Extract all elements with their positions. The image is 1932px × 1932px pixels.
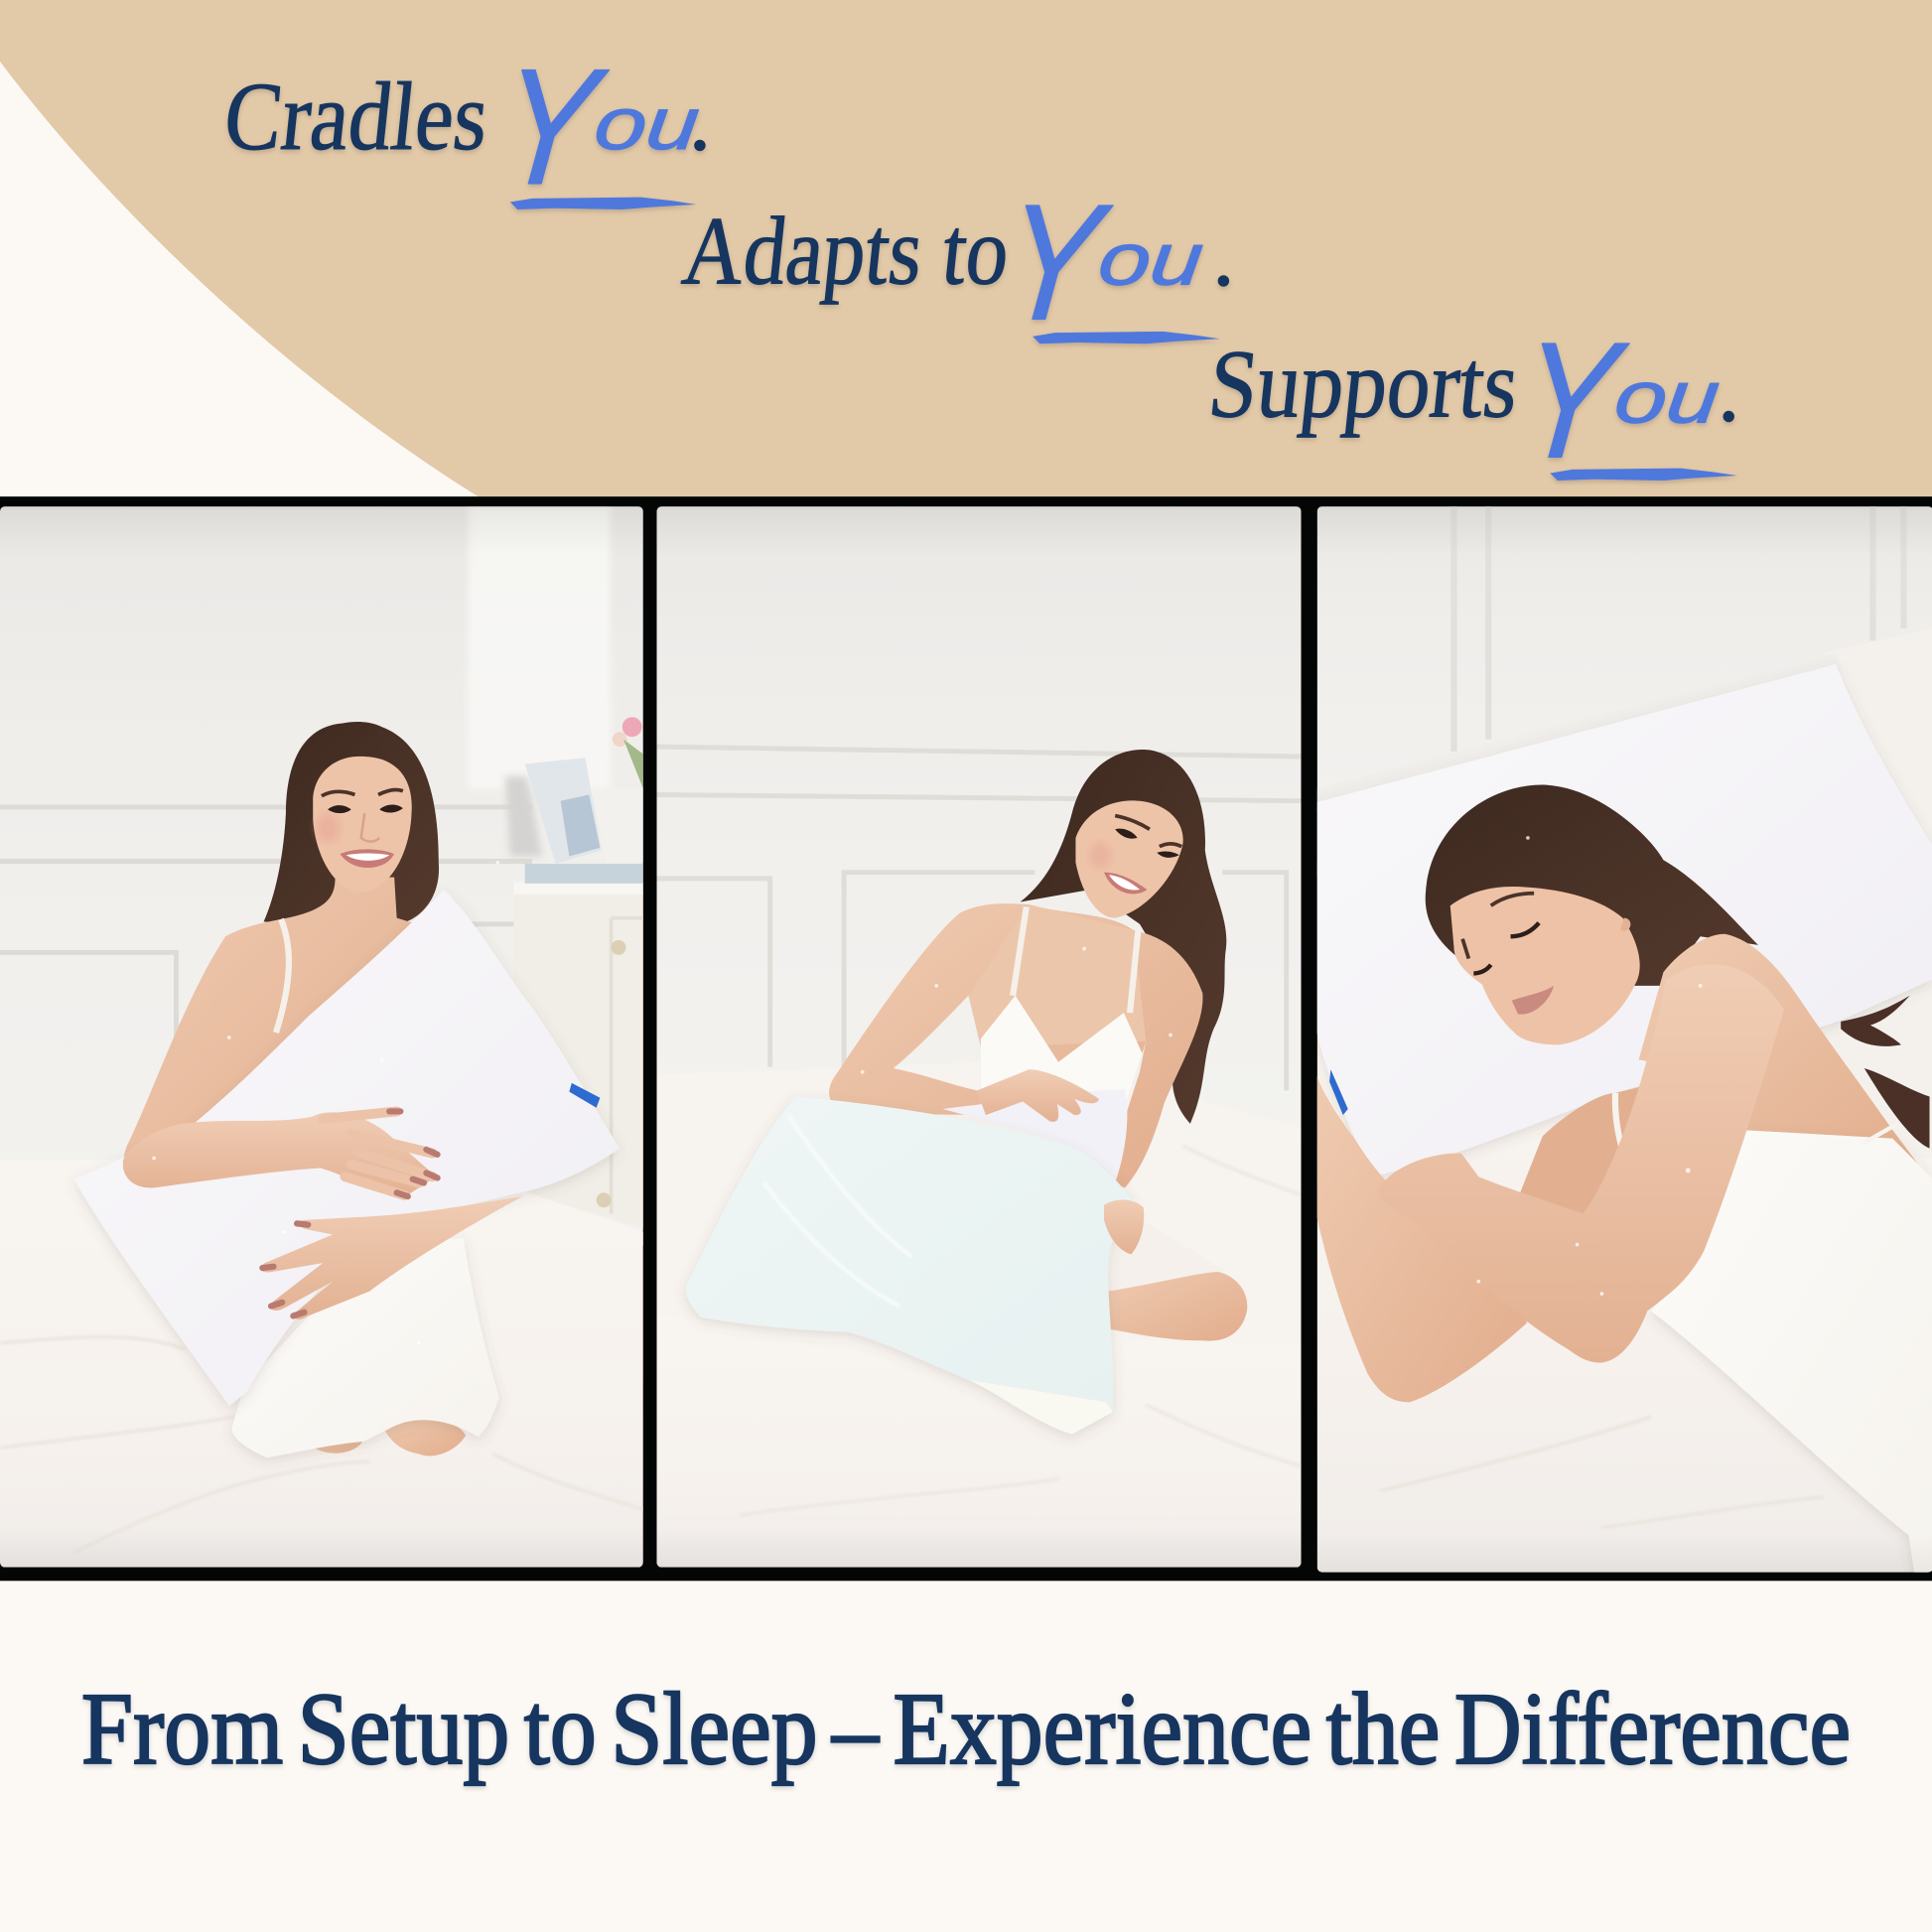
face [1450,887,1640,1044]
wall moldings [656,747,1302,1090]
tan curved header shape [0,0,1932,496]
wall [0,506,643,1246]
hair [1021,750,1226,1124]
period [1724,411,1734,422]
wall [656,506,1302,1147]
pillow label [1329,1069,1348,1115]
script word: You: Y [491,35,614,219]
text: Cradles: Cradles [219,63,493,171]
period [694,140,706,151]
knee and calf [1104,1272,1247,1341]
headboard right [1725,628,1932,1159]
pillow cream edge [968,1380,1113,1435]
photo panel 2: woman seated with pillow [656,506,1302,1568]
bed [0,1160,643,1568]
hair tail [1841,996,1930,1149]
face [313,757,412,893]
strip below headboard [1317,653,1842,813]
nightstand [514,883,643,1228]
skirt [1106,1220,1227,1292]
brush underline [510,198,696,209]
mattress lower [656,1314,1302,1568]
vignette [0,506,643,528]
headline line 3 [1204,309,1737,492]
wall [1317,506,1932,876]
dress strap [276,919,289,1033]
bottom vignette [656,1528,1302,1568]
dust specks [861,947,1173,1074]
lower forearm and hand [260,1196,522,1319]
pillow creases [763,1115,911,1307]
dress straps [1013,906,1139,1013]
wall moldings [1453,506,1903,752]
far forearm [1314,1069,1527,1402]
upper forearm and hand [123,1111,438,1196]
back and shoulder [1639,934,1928,1177]
main pillow [686,1097,1133,1435]
bed sheet folds [1380,1417,1824,1528]
face [1075,800,1183,918]
script word: You: ou [1611,355,1724,439]
dress strap [1615,1093,1627,1166]
script word: You: ou [1095,217,1207,301]
text: Supports: Supports [1204,331,1523,438]
dress bodice [981,996,1142,1099]
pillow [1314,664,1932,1176]
bed folds [0,1337,643,1553]
headline line 2 [678,171,1229,354]
dress skirt [231,1238,499,1457]
near arm [1378,964,1784,1363]
dress [1651,1130,1932,1584]
chest fill [968,904,1146,1047]
knees [314,1418,466,1455]
dust specks [1476,836,1703,1296]
photo panel 1: woman hugging pillow [0,506,643,1568]
black film frame [0,496,1932,1581]
script word: You: ou [591,81,703,165]
lower hand [1104,1199,1144,1254]
books and flowers [505,717,643,884]
vignette [1317,506,1932,556]
bed [1317,863,1932,1578]
wall moldings [0,804,532,1036]
torso under arm [1509,1084,1676,1257]
brush underline [1550,469,1737,481]
bed folds [740,1146,1302,1516]
dress strap back [1863,1124,1897,1144]
headline line 1 [219,35,708,219]
dust specks [152,861,499,1345]
hair [264,722,439,922]
torso and arms [829,903,1202,1187]
hair [1426,784,1758,986]
shoulders and upper arm [123,878,411,1158]
pillow label [569,1083,600,1108]
script word: You: Y [996,171,1118,354]
window light [469,506,610,788]
hand on pillow [977,1069,1099,1122]
period [1218,275,1229,287]
bottom vignette [1317,1533,1932,1573]
script word: You: Y [1512,309,1634,492]
pillow [73,890,620,1406]
brush underline [1033,332,1220,344]
photo panel 3: woman sleeping on pillow [1314,506,1932,1584]
text: Adapts to: Adapts to [678,198,1015,305]
bed [656,1062,1302,1568]
bottom vignette [0,1556,643,1567]
back pillow flap [942,1089,1127,1182]
vignette [656,506,1302,556]
